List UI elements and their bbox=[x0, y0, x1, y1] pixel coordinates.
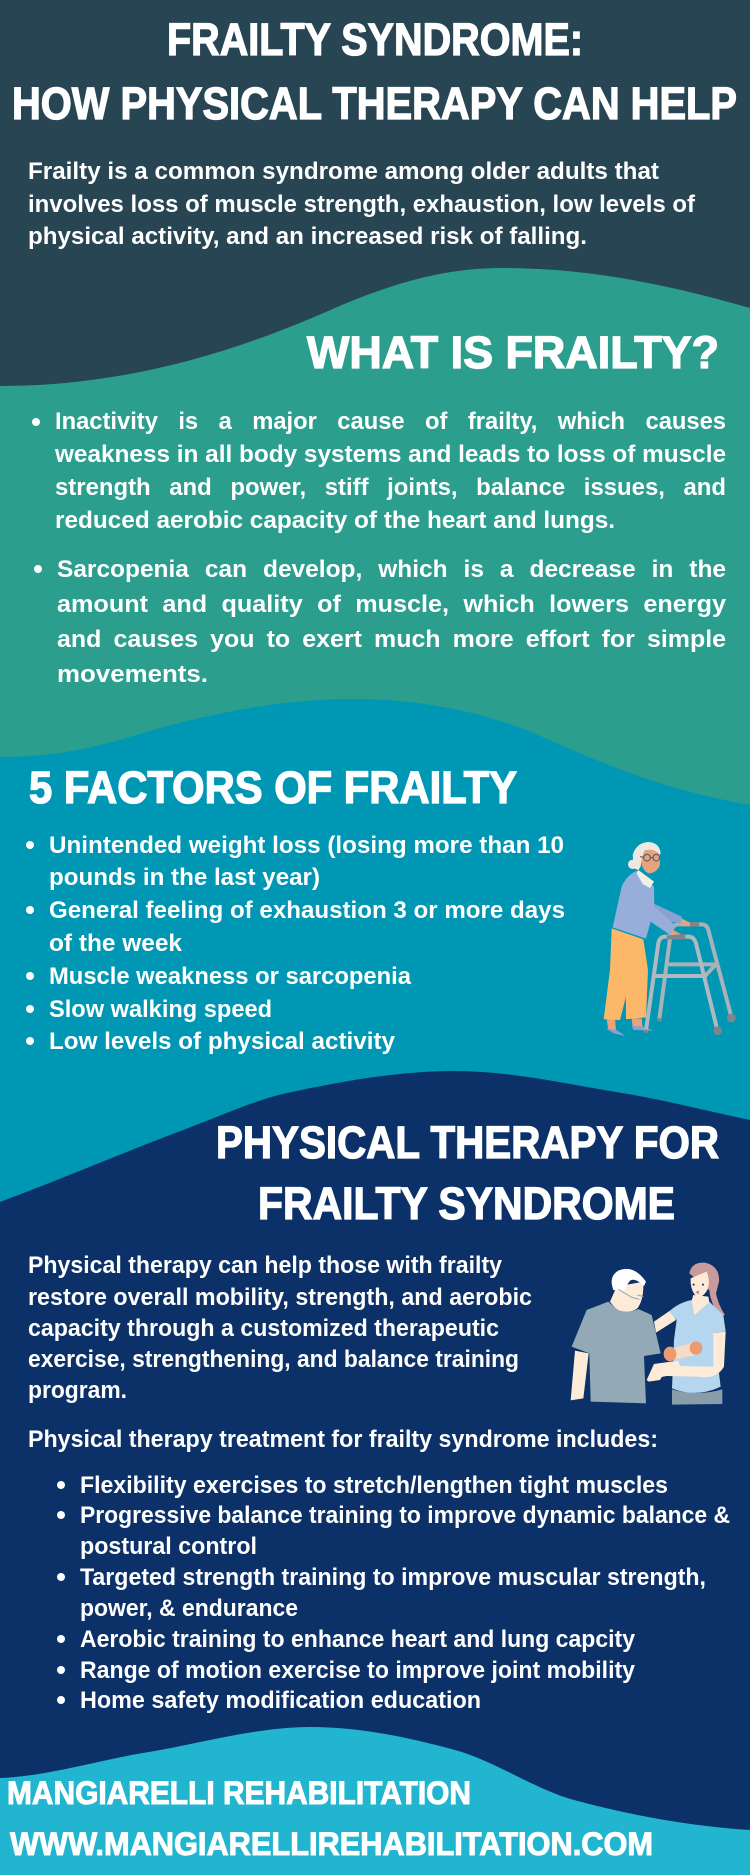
title bbox=[12, 14, 737, 129]
man hair bbox=[612, 1269, 646, 1291]
bullet list: 5 factors: Slow walking speed bbox=[49, 996, 272, 1023]
therapist neck bbox=[692, 1295, 709, 1316]
bullet list: treatment: postural control bbox=[80, 1533, 257, 1560]
bullet list: what is frailty: weakness in all body systems and leads to loss of muscle bbox=[54, 441, 726, 468]
dumbbell bbox=[673, 1343, 696, 1359]
heading: physical therapy for frailty syndrome bbox=[216, 1117, 719, 1229]
icon: therapist helping older man bbox=[571, 1263, 726, 1405]
collar bbox=[637, 870, 654, 888]
intro paragraph: Frailty is a common syndrome among older adults that bbox=[28, 158, 659, 185]
heading: physical therapy for frailty syndrome: FRAILTY SYNDROME bbox=[258, 1178, 675, 1229]
hair bun bbox=[628, 860, 637, 869]
wave panel: navy section bbox=[0, 1071, 750, 1875]
bullet list: 5 factors: Muscle weakness or sarcopenia bbox=[49, 963, 412, 990]
heading: 5 factors of frailty: 5 FACTORS OF FRAILTY bbox=[29, 762, 517, 813]
bullet list: 5 factors: General feeling of exhaustion 3 or more days bbox=[49, 897, 565, 924]
wave panel: cyan footer bbox=[0, 1727, 750, 1875]
therapist arm on shoulder bbox=[654, 1311, 676, 1333]
heading: what is frailty: WHAT IS FRAILTY? bbox=[307, 327, 719, 378]
footer: website: WWW.MANGIARELLIREHABILITATION.COM bbox=[10, 1826, 653, 1862]
hand bbox=[671, 929, 681, 939]
face bbox=[641, 849, 660, 873]
man shirt bbox=[572, 1302, 661, 1403]
bullet list: what is frailty: Inactivity is a major cause of frailty, which causes bbox=[55, 408, 726, 435]
hair bbox=[633, 842, 661, 870]
bullet list: treatment bbox=[57, 1472, 730, 1714]
bullet list: 5 factors: pounds in the last year) bbox=[49, 864, 320, 891]
bullet list: what is frailty: movements. bbox=[57, 661, 208, 688]
paragraph: physical therapy: capacity through a customized therapeutic bbox=[28, 1315, 499, 1342]
bullet list: 5 factors: Low levels of physical activity bbox=[49, 1028, 396, 1055]
man head and neck bbox=[610, 1282, 643, 1312]
bullet list: what is frailty: and causes you to exert much more effort for simple bbox=[57, 626, 726, 653]
icon: elderly woman with walker bbox=[604, 842, 736, 1036]
intro paragraph bbox=[28, 158, 696, 250]
bullet list: treatment: Progressive balance training to improve dynamic balance & bbox=[80, 1502, 730, 1529]
intro paragraph: involves loss of muscle strength, exhaustion, low levels of bbox=[28, 191, 696, 218]
bullet list: what is frailty: reduced aerobic capacity of the heart and lungs. bbox=[55, 507, 615, 534]
glasses bbox=[640, 854, 660, 861]
bullet list: treatment: Aerobic training to enhance heart and lung capcity bbox=[80, 1626, 636, 1653]
bullet list: what is frailty: strength and power, stiff joints, balance issues, and bbox=[55, 474, 726, 501]
intro paragraph: physical activity, and an increased risk of falling. bbox=[28, 223, 587, 250]
paragraph: physical therapy: program. bbox=[28, 1377, 127, 1404]
therapist face bbox=[691, 1272, 709, 1297]
near walker frame bbox=[646, 937, 717, 1031]
bullet list: what is frailty: amount and quality of muscle, which lowers energy bbox=[57, 591, 727, 618]
bullet list: what is frailty bbox=[32, 408, 727, 688]
bullet list: what is frailty: Sarcopenia can develop, which is a decrease in the bbox=[57, 556, 726, 583]
wave panel: blue section bbox=[0, 699, 750, 1875]
man forearm and therapist forearm bbox=[647, 1361, 680, 1382]
trousers bbox=[604, 928, 648, 1020]
paragraph: physical therapy: Physical therapy can help those with frailty bbox=[28, 1252, 503, 1279]
title: FRAILTY SYNDROME: bbox=[167, 14, 583, 65]
cardigan bbox=[613, 871, 675, 939]
bullet list: treatment: Targeted strength training to improve muscular strength, bbox=[80, 1564, 706, 1591]
paragraph: physical therapy: restore overall mobility, strength, and aerobic bbox=[28, 1284, 532, 1311]
therapist top bbox=[669, 1300, 726, 1393]
feet bbox=[607, 1018, 643, 1030]
footer: company name: MANGIARELLI REHABILITATION bbox=[7, 1775, 471, 1811]
bullet list: 5 factors: of the week bbox=[49, 930, 183, 957]
far arm bbox=[653, 903, 682, 924]
bullet list: treatment: Flexibility exercises to stretch/lengthen tight muscles bbox=[80, 1472, 668, 1499]
paragraph: physical therapy: exercise, strengthening, and balance training bbox=[28, 1346, 519, 1373]
paragraph: physical therapy bbox=[28, 1252, 532, 1404]
bullet list: treatment: Home safety modification education bbox=[80, 1687, 481, 1714]
therapist hair back bbox=[689, 1263, 725, 1316]
far walker frame bbox=[659, 924, 731, 1019]
bullet list: treatment: Range of motion exercise to improve joint mobility bbox=[80, 1657, 636, 1684]
treatment intro line: Physical therapy treatment for frailty syndrome includes: bbox=[28, 1426, 658, 1453]
bullet list: 5 factors: Unintended weight loss (losing more than 10 bbox=[49, 832, 564, 859]
bullet list: 5 factors bbox=[26, 832, 565, 1055]
therapist trousers bbox=[672, 1389, 722, 1405]
bullet list: treatment: power, & endurance bbox=[80, 1595, 298, 1622]
man left arm bbox=[571, 1351, 589, 1400]
man glasses bbox=[618, 1289, 643, 1299]
